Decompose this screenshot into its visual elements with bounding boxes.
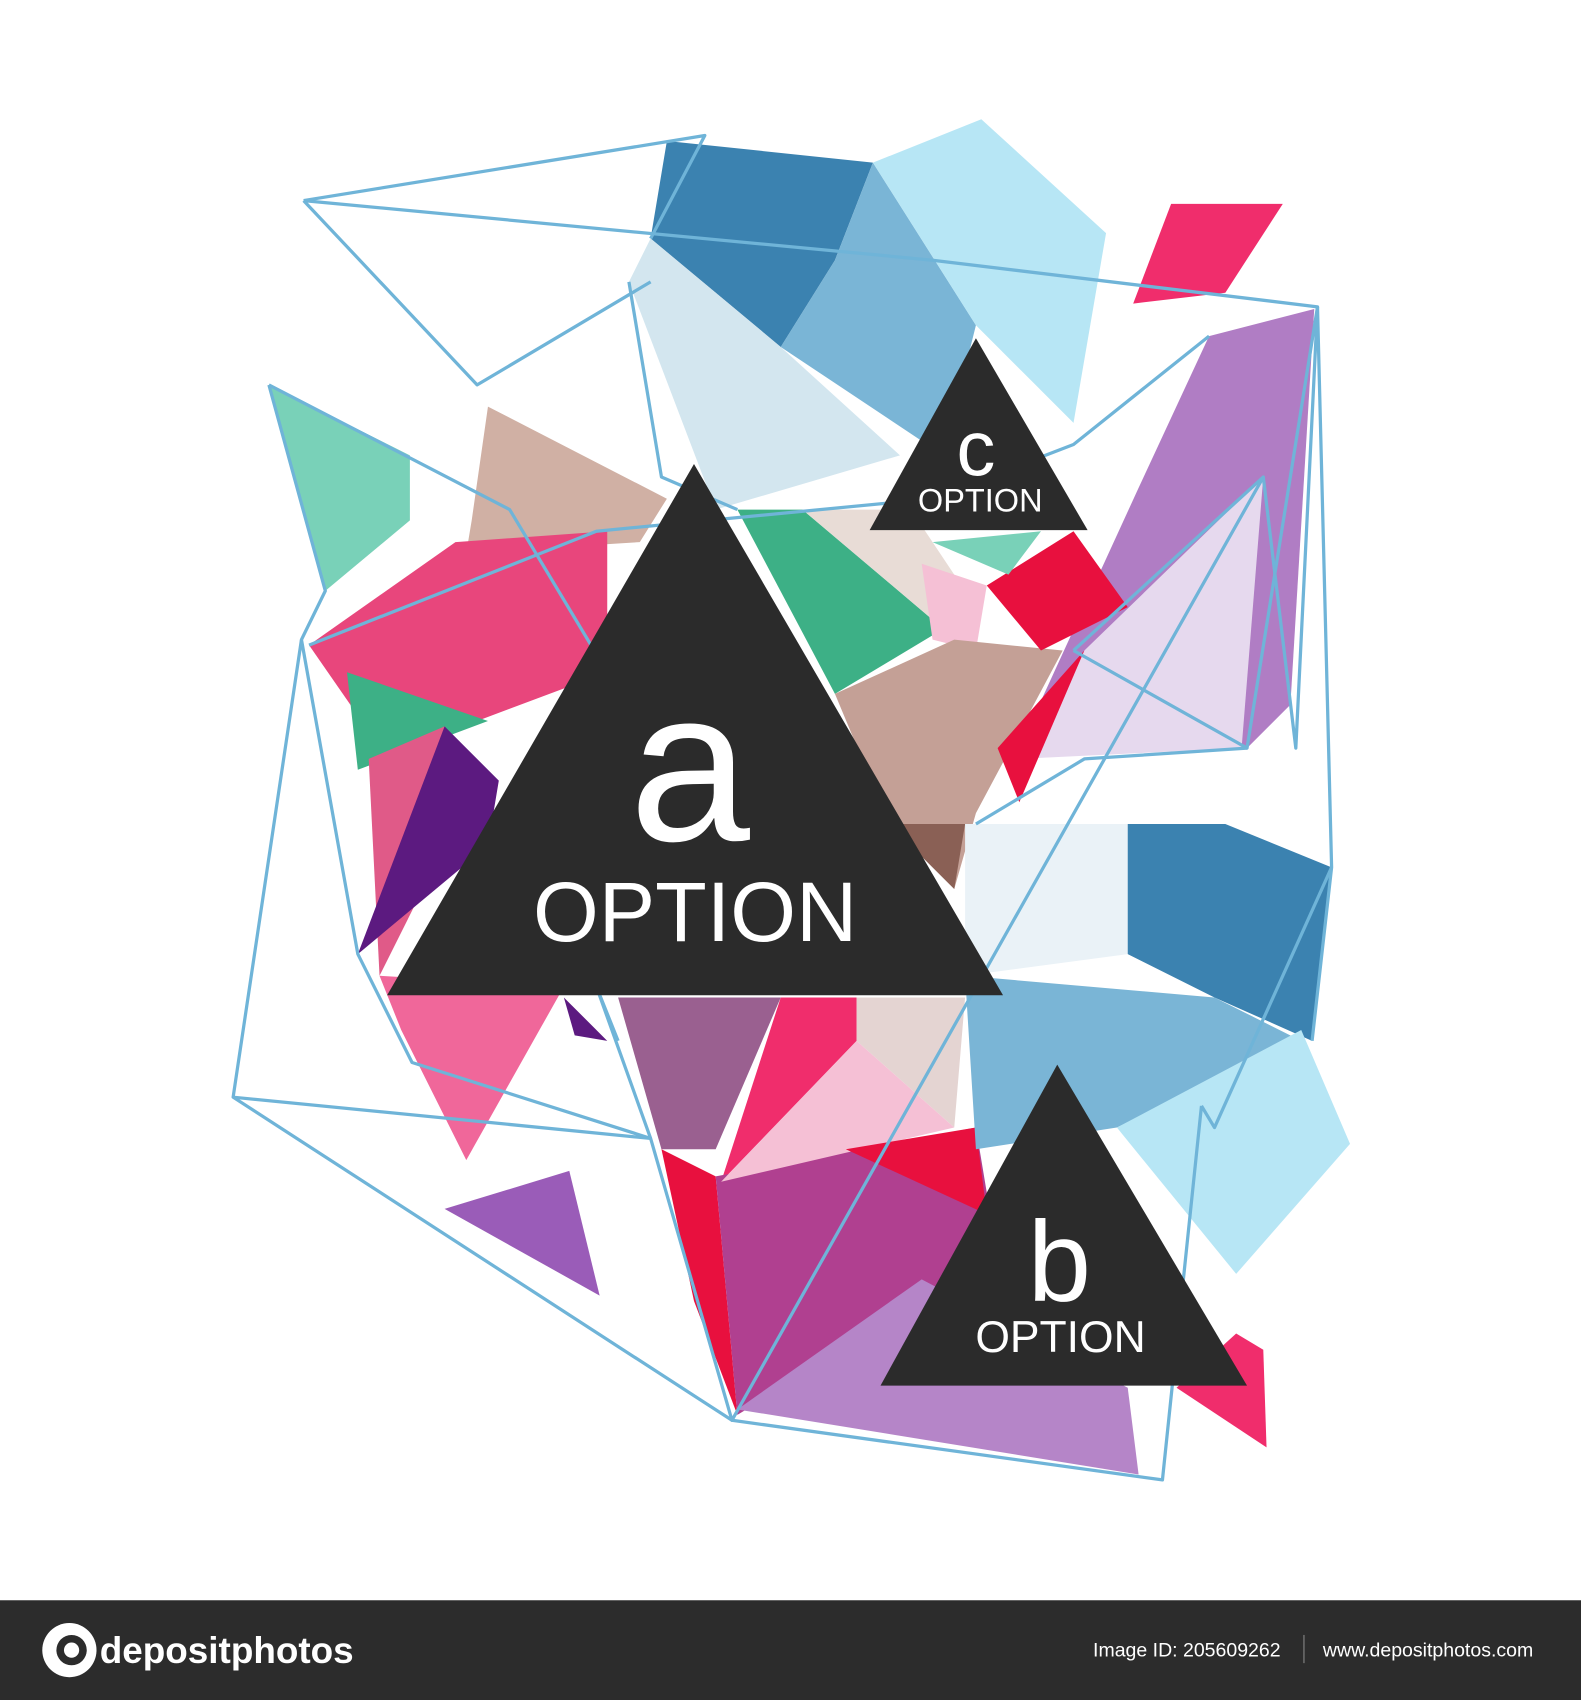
footer bar: [0, 1600, 1581, 1700]
triangle: option a: [387, 464, 1003, 995]
icon: logo: [42, 1623, 97, 1677]
footer bar: Image ID: 205609262: [1093, 1640, 1281, 1662]
triangle: option b: OPTION: [975, 1313, 1146, 1362]
triangle: option c: [870, 338, 1088, 530]
triangle: option b: b: [1028, 1199, 1091, 1326]
triangle: option b: [881, 1065, 1247, 1386]
triangle: option a: OPTION: [533, 864, 857, 959]
footer bar: depositphotos: [100, 1630, 354, 1671]
polygon cluster: [269, 119, 1350, 1474]
wireframe lines: [233, 136, 1332, 1480]
footer bar: www.depositphotos.com: [1322, 1640, 1533, 1662]
triangle: option a: a: [629, 644, 750, 886]
triangle: option c: c: [956, 404, 995, 492]
triangle: option c: OPTION: [918, 483, 1043, 519]
